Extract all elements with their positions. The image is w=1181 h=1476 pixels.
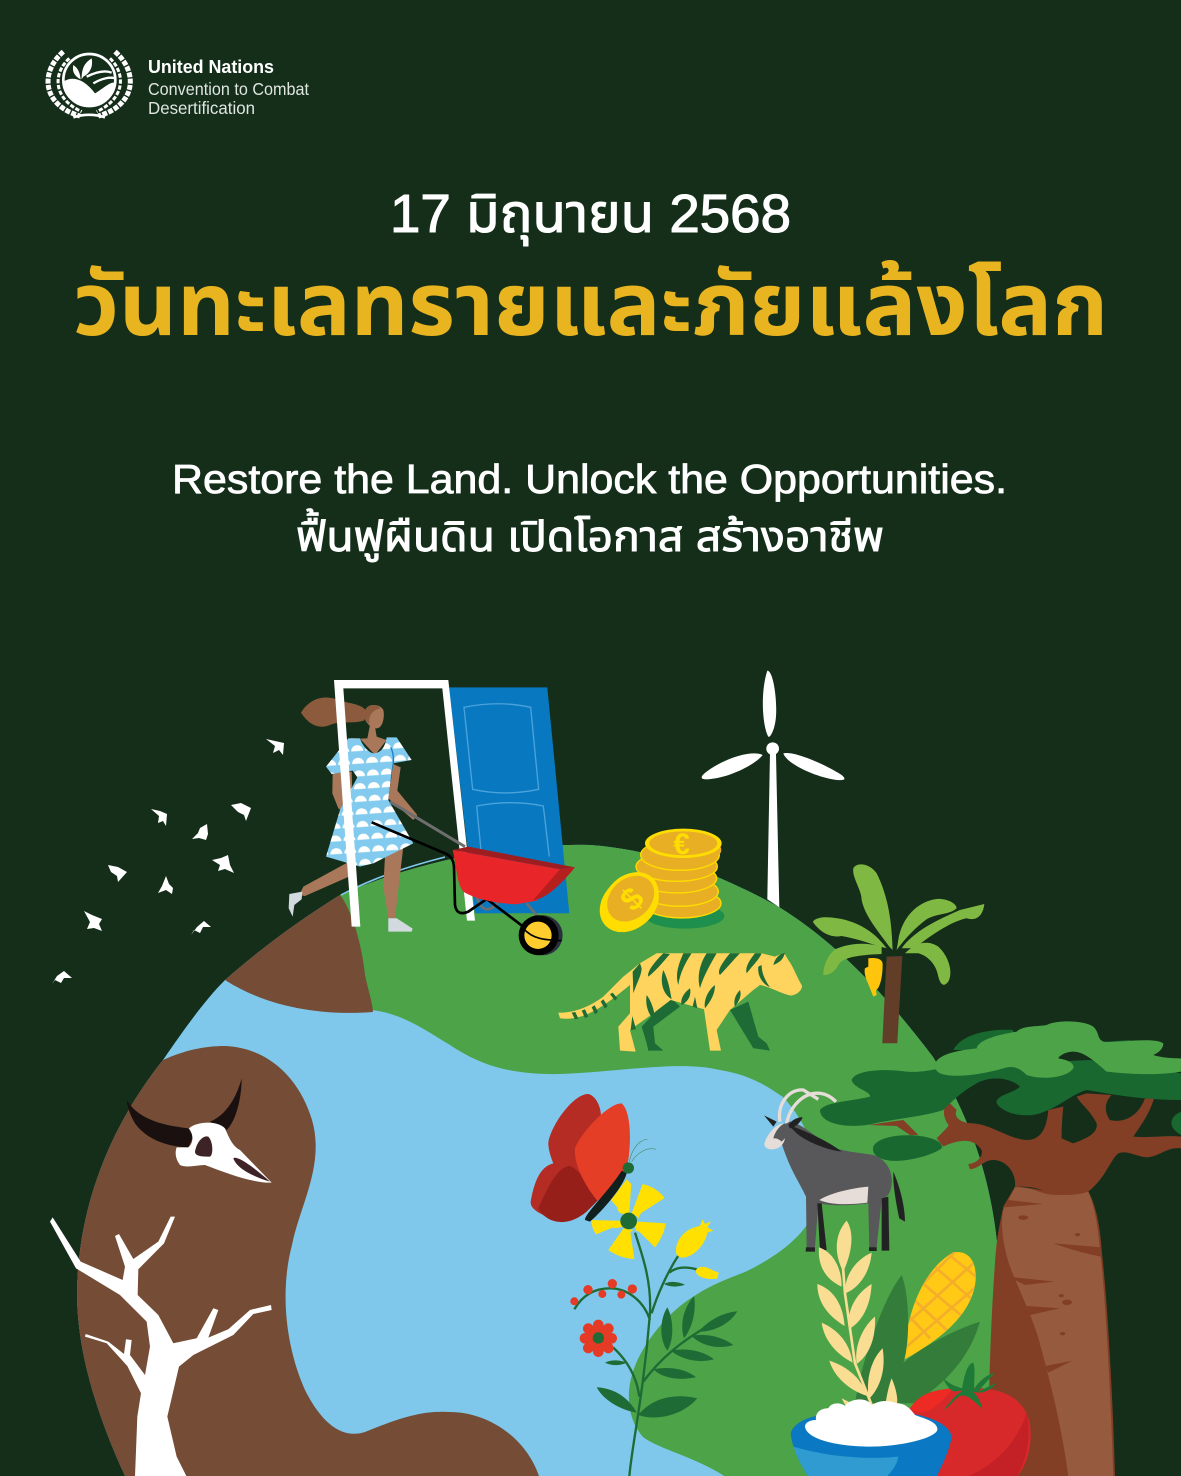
- water: [77, 845, 1000, 1476]
- butterfly body: [585, 1171, 627, 1222]
- wind turbine: [702, 671, 844, 907]
- canopy light: [934, 1021, 1181, 1078]
- trunk: [988, 1187, 1115, 1476]
- coin stack: €: [673, 828, 690, 861]
- yellow buds: [676, 1219, 719, 1279]
- slogan: English: Restore the Land. Unlock the Opportunities.: [172, 456, 1007, 502]
- tiger: [558, 953, 802, 1052]
- oryx: [764, 1090, 905, 1252]
- logo: UNCCD: [48, 52, 309, 118]
- canopy dark: [953, 1030, 1181, 1135]
- brown land: top: [225, 895, 373, 1013]
- banana tree: [813, 864, 984, 1043]
- butterfly: [531, 1094, 656, 1222]
- logo text: [148, 57, 309, 118]
- brown land: left: [77, 1046, 539, 1476]
- woman: [289, 698, 417, 932]
- white door frame: [334, 680, 475, 927]
- flower and butterfly: [531, 1094, 737, 1476]
- logo emblem: [48, 52, 130, 117]
- yellow flower: [591, 1179, 666, 1259]
- thin water rim: [341, 857, 445, 895]
- logo text: Desertification: [148, 98, 255, 118]
- illustration: globe: [77, 830, 1020, 1476]
- wheat: [817, 1221, 897, 1407]
- skull: [127, 1078, 272, 1183]
- door and woman with wheelbarrow: [289, 680, 575, 955]
- title: World Day to Combat Desertification and Drought in Thai: วันทะเลทรายและภัยแล้งโลก: [73, 255, 1108, 354]
- corn: [855, 1250, 980, 1403]
- tomato: [910, 1363, 1031, 1476]
- baobab tree: [820, 1021, 1181, 1476]
- blue door: [449, 687, 569, 913]
- red berries and flower: [570, 1279, 637, 1357]
- rice bowl: [791, 1399, 952, 1476]
- coin stack: $: [613, 880, 651, 918]
- title: date: 17 มิถุนายน 2568: [390, 184, 791, 246]
- plant stems: [574, 1233, 710, 1476]
- logo text: Convention to Combat: [148, 79, 309, 99]
- wheelbarrow: [372, 802, 575, 955]
- coin stack: [588, 828, 724, 944]
- plant leaves: [597, 1282, 737, 1418]
- birds: [52, 739, 284, 984]
- branches: [937, 1093, 1181, 1195]
- logo text: United Nations: [148, 57, 274, 77]
- dead tree: [50, 1217, 272, 1476]
- green land: [330, 830, 1020, 1476]
- slogan: Thai: ฟื้นฟูผืนดิน เปิดโอกาส สร้างอาชีพ: [296, 508, 884, 562]
